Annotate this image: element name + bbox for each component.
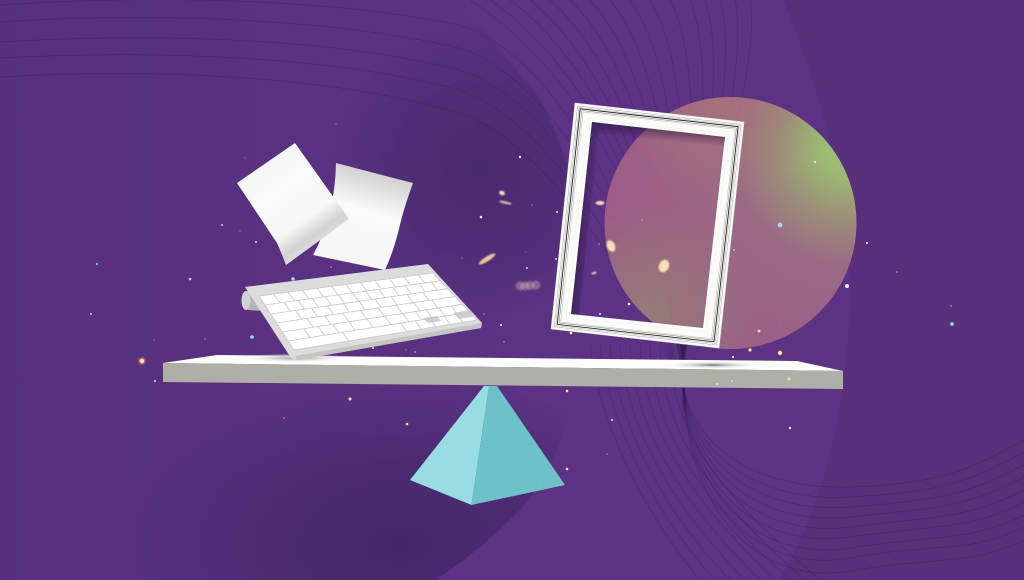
paper sheet front	[237, 143, 349, 265]
white particles	[480, 161, 952, 382]
frame moulding lines	[554, 106, 741, 345]
keyboard body	[245, 264, 482, 360]
frame outer edge	[551, 103, 744, 348]
frame left shadow	[571, 122, 600, 315]
shadow under frame	[663, 361, 763, 369]
pyramid right face	[472, 386, 565, 505]
pyramid	[410, 386, 565, 505]
gold particles	[140, 156, 791, 470]
paper sheet back	[313, 163, 413, 270]
keys area	[259, 273, 477, 350]
key grid lines	[265, 275, 470, 341]
gold particle halo	[138, 358, 146, 364]
converging dark line behind plank	[680, 345, 688, 425]
frame body	[551, 103, 744, 348]
sparkling particles	[90, 124, 954, 486]
faint particles	[153, 157, 600, 351]
grey keys	[423, 310, 476, 323]
background right panel	[780, 0, 1024, 580]
plank	[163, 354, 843, 389]
keyboard	[242, 264, 482, 360]
plank front face	[163, 363, 843, 389]
large cream bokeh particles	[478, 190, 671, 275]
pyramid left face	[410, 386, 489, 505]
blue particles	[90, 124, 954, 486]
keyboard front edge	[295, 323, 482, 360]
frame inner shadow	[591, 122, 725, 148]
sphere	[604, 97, 856, 349]
teal particles on sphere	[662, 269, 781, 325]
blurred streak	[516, 280, 540, 290]
background left shading	[153, 54, 568, 580]
picture frame	[551, 103, 744, 348]
plank top face	[163, 355, 843, 371]
shadow under keyboard	[240, 354, 350, 362]
keyboard foot	[242, 291, 262, 311]
